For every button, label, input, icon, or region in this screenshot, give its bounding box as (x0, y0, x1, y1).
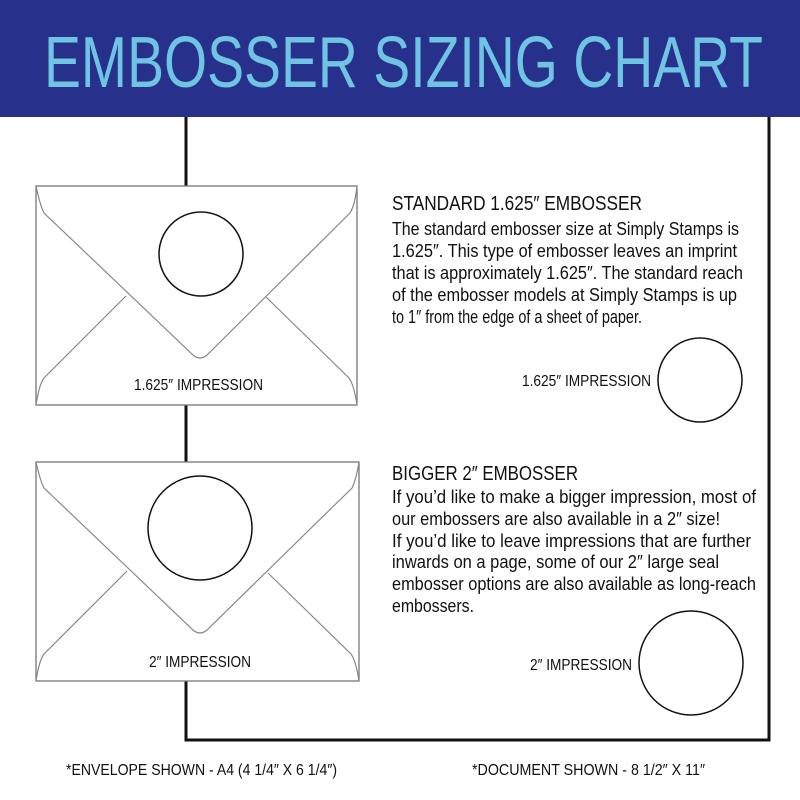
label: envelope 1: 1.625″ IMPRESSION (134, 377, 263, 394)
section: bigger embosser: inwards on a page, some of our 2″ large seal (392, 552, 719, 572)
section: bigger embosser: BIGGER 2″ EMBOSSER (392, 463, 578, 485)
section: bigger embosser: embossers. (392, 596, 474, 616)
footnote: envelope: *ENVELOPE SHOWN - A4 (4 1/4″ X 6 1/4″) (66, 762, 337, 779)
envelope 1 (36, 186, 357, 405)
section: standard embosser: STANDARD 1.625″ EMBOSSER (392, 193, 642, 215)
section: standard embosser (392, 193, 743, 327)
section: bigger embosser: embosser options are also available as long-reach (392, 574, 756, 594)
envelope 2 (36, 462, 359, 681)
section: bigger embosser (392, 463, 757, 616)
impression sample 2: 2″ IMPRESSION (530, 657, 632, 674)
circle: 2 inch envelope impression (148, 476, 252, 580)
section: standard embosser: 1.625″. This type of embosser leaves an imprint (392, 241, 737, 261)
impression sample 1: 1.625″ IMPRESSION (522, 373, 651, 390)
document outline (184, 117, 770, 741)
circle: 1.625 envelope impression (159, 212, 243, 296)
impression sample 1 (522, 338, 742, 422)
label: envelope 2: 2″ IMPRESSION (149, 654, 251, 671)
section: standard embosser: to 1″ from the edge of a sheet of paper. (392, 307, 642, 327)
section: standard embosser: that is approximately 1.625″. The standard reach (392, 263, 743, 283)
section: bigger embosser: If you’d like to leave impressions that are further (392, 531, 751, 551)
section: bigger embosser: If you’d like to make a bigger impression, most of (392, 487, 757, 507)
header banner (0, 0, 800, 117)
footnote: document: *DOCUMENT SHOWN - 8 1/2″ X 11″ (472, 762, 705, 779)
section: standard embosser: of the embosser models at Simply Stamps is up (392, 285, 737, 305)
impression sample 2 (530, 611, 743, 715)
section: standard embosser: The standard embosser size at Simply Stamps is (392, 219, 739, 239)
section: bigger embosser: our embossers are also available in a 2″ size! (392, 509, 720, 529)
